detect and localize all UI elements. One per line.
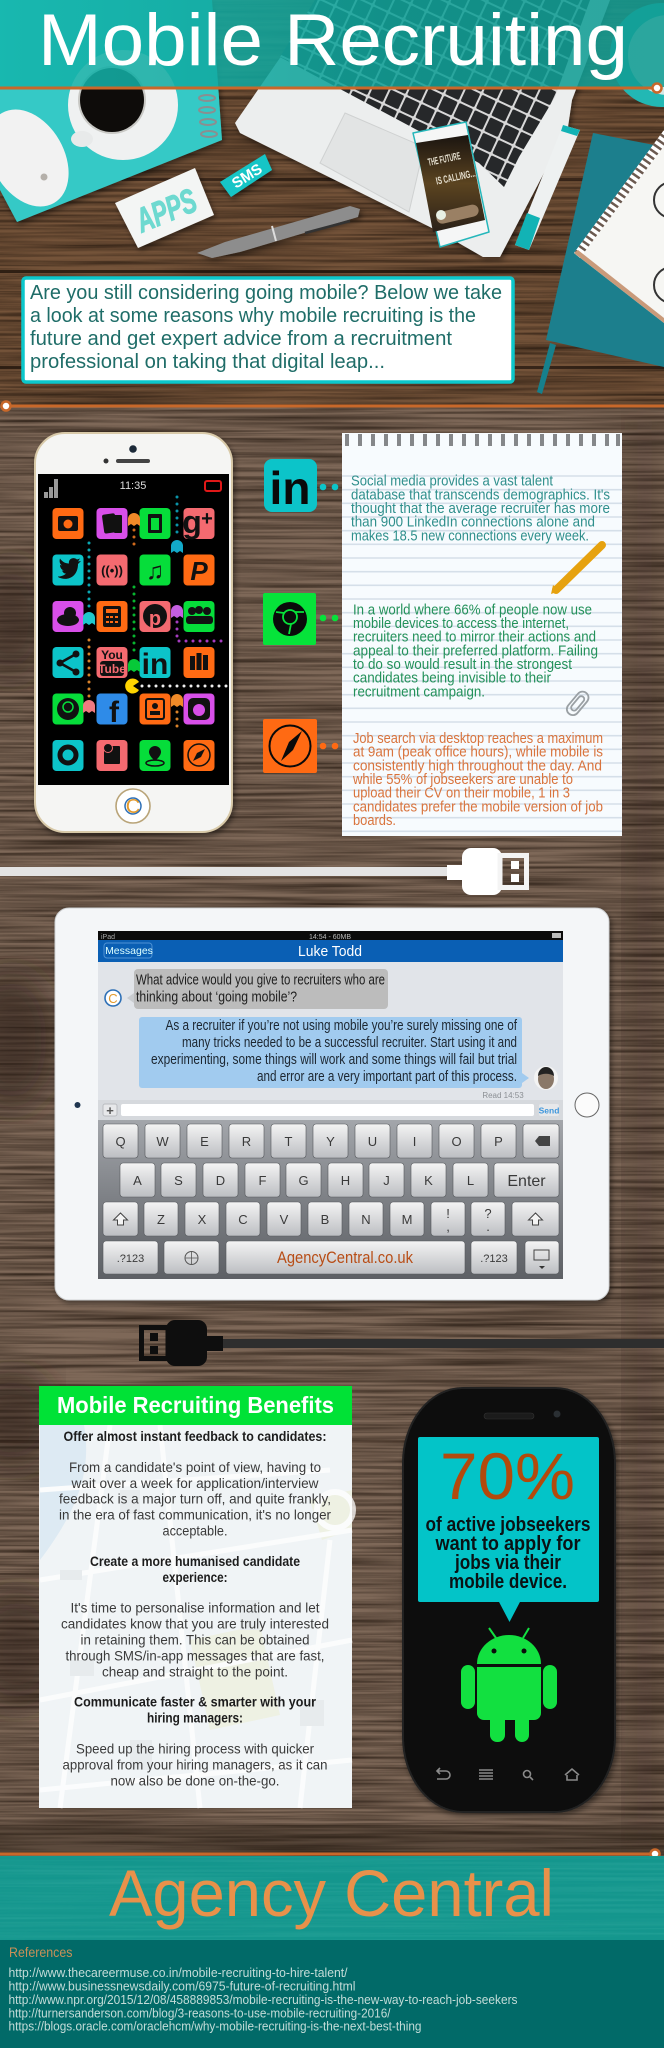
text block: job search: [352, 730, 603, 829]
benefit 1: feedback is a major turn off, and quite frankly,: [59, 1491, 331, 1507]
phone nav buttons: [437, 1768, 579, 1780]
status bar: [98, 931, 563, 941]
pacman trail dots and ghosts: [83, 497, 227, 728]
icon: silver pen: [197, 206, 360, 258]
app glyphs row 5: f: [109, 696, 120, 729]
text block: job search: while 55% of jobseekers are unable to: [352, 771, 573, 788]
text block: internet usage: appeal to their preferred platform. Failing: [353, 642, 598, 659]
answer bubble: and error are a very important part of this process.: [257, 1068, 517, 1085]
brand name: Agency Central: [109, 1856, 554, 1930]
text block: social media: [351, 473, 610, 544]
app glyphs row 4: Tube: [98, 662, 126, 676]
earpiece and camera: [484, 1410, 560, 1419]
callout: 70% statistic: want to apply for: [435, 1533, 581, 1555]
app glyphs row 2: [58, 556, 208, 586]
nav bar: [98, 940, 563, 962]
app glyphs row 2: P: [190, 556, 208, 586]
app icon grid: [52, 504, 214, 771]
keyboard row 3: !: [446, 1206, 450, 1221]
reference links: http://turnersanderson.com/blog/3-reasons-to-use-mobile-recruiting-2016/: [8, 2005, 391, 2020]
ghosts: [83, 513, 183, 713]
icon: coffee cup: [68, 50, 178, 160]
social icon: chrome: [263, 593, 338, 645]
benefit 2: in retaining them. This can be obtained: [80, 1631, 310, 1647]
answer bubble: many tricks needed to be a successful recruiter. Start using it and: [182, 1034, 517, 1051]
app glyphs row 2: ((•)): [101, 563, 123, 578]
social icon: linkedin: [264, 459, 338, 514]
notepad panel: [342, 433, 622, 836]
pacman: [125, 679, 139, 694]
text block: job search: Job search via desktop reaches a maximum: [353, 730, 603, 747]
read receipt: Read 14:53: [482, 1091, 524, 1100]
question bubble: What advice would you give to recruiters who are: [136, 971, 385, 988]
references heading: References: [9, 1944, 72, 1960]
divider line with node top: [0, 84, 662, 92]
app glyphs row 1: +: [201, 508, 213, 530]
app glyphs row 1: [58, 504, 213, 540]
app glyphs row 6: [60, 744, 210, 766]
keyboard row 3: .: [486, 1219, 490, 1234]
text block: internet usage: In a world where 66% of people now use: [353, 601, 592, 618]
benefit 2: experience:: [162, 1569, 228, 1585]
question bubble: [127, 969, 388, 1009]
recruiter logo avatar: [105, 990, 121, 1006]
keyboard row 2: G: [298, 1173, 309, 1188]
keyboard row 2: [120, 1163, 559, 1197]
footer references: [0, 1940, 664, 2048]
avatar: Luke Todd: [534, 1066, 558, 1090]
text block: internet usage: mobile devices to access the internet,: [353, 615, 569, 632]
callout: 70% statistic: mobile device.: [449, 1571, 567, 1593]
icon: computer mouse: [0, 95, 85, 221]
android phone: [403, 1388, 615, 1812]
keyboard row 1: Q: [115, 1134, 126, 1149]
status bar: [44, 479, 221, 498]
app glyphs row 1: g: [182, 504, 202, 540]
text block: job search: candidates prefer the mobile version of job: [353, 798, 603, 815]
icon: smartphone on desk: [413, 122, 489, 247]
question bubble: thinking about ‘going mobile’?: [136, 989, 297, 1006]
keyboard row 1: U: [368, 1134, 377, 1149]
reference links: http://www.thecareermuse.co.in/mobile-recruiting-to-hire-talent/: [8, 1965, 348, 1980]
keyboard row 1: Y: [326, 1134, 335, 1149]
keyboard row 1: W: [156, 1134, 169, 1149]
app glyphs row 2: ♫: [146, 558, 164, 585]
callout: 70% statistic: 70%: [440, 1439, 575, 1513]
reference links: [8, 1965, 518, 2034]
text block: internet usage: recruitment campaign.: [353, 683, 485, 700]
answer bubble: experimenting, some things will work and some things will fail but trial: [151, 1051, 517, 1068]
keyboard row 1: T: [285, 1134, 293, 1149]
benefit 2: [61, 1553, 329, 1679]
keyboard row 3: C: [238, 1212, 248, 1227]
white USB cable: [0, 848, 526, 895]
icon: teal notebook left: [0, 0, 222, 222]
message input bar: +: [106, 1103, 114, 1118]
ruled lines: [342, 476, 622, 831]
keyboard row 2: K: [424, 1173, 433, 1188]
home button: [116, 789, 150, 823]
app glyphs row 3: p: [149, 608, 161, 630]
keyboard row 1: [103, 1124, 559, 1158]
callout: 70% statistic: [418, 1437, 599, 1622]
text block: internet usage: recruiters need to mirror their actions and: [353, 629, 596, 646]
panel header: Mobile Recruiting Benefits: [57, 1392, 334, 1418]
app glyphs row 4: You: [101, 648, 123, 662]
benefit 3: [62, 1694, 328, 1788]
benefit 1: in the era of fast communication, it's no longer: [59, 1507, 331, 1523]
text block: social media: than 900 LinkedIn connections alone and: [351, 514, 595, 531]
text block: social media: makes 18.5 new connections every week.: [351, 527, 589, 544]
notepad binding rings: [347, 434, 618, 446]
home button: C: [126, 796, 140, 818]
status bar: 14:54 - 60MB: [309, 934, 351, 941]
text block: internet usage: to do so would result in the strongest: [353, 656, 573, 673]
text block: social media: database that transcends demographics. It's: [351, 486, 610, 503]
icon: apps card: APPS: [130, 182, 202, 240]
icon: sms tag: [220, 154, 272, 197]
benefit 3: hiring managers:: [147, 1710, 243, 1726]
benefit 2: Create a more humanised candidate: [90, 1553, 300, 1569]
divider line with node second: [2, 402, 664, 410]
benefit 1: From a candidate's point of view, having to: [69, 1459, 321, 1475]
icon: pencil: [551, 545, 602, 594]
keyboard row 1: E: [200, 1134, 209, 1149]
icon: smartphone on desk: THE FUTURE: [427, 150, 462, 169]
tablet screen: [98, 931, 563, 1279]
intro callout: Are you still considering going mobile? Below we take: [30, 282, 502, 304]
intro callout: future and get expert advice from a recruitment: [30, 328, 452, 350]
icon: paperclip: [564, 689, 591, 718]
header band: [0, 0, 664, 87]
benefit 3: now also be done on-the-go.: [110, 1772, 280, 1788]
keyboard row 3: ,: [446, 1219, 450, 1234]
keyboard row 4: .?123: [117, 1253, 144, 1265]
keyboard row 4: .?123: [480, 1253, 508, 1265]
text block: social media: Social media provides a vast talent: [351, 473, 554, 490]
keyboard row 3: X: [198, 1212, 207, 1227]
keyboard row 2: H: [341, 1173, 350, 1188]
keyboard row 3: [103, 1202, 559, 1236]
keyboard row 3: Z: [157, 1212, 165, 1227]
title: Mobile Recruiting: [38, 0, 628, 81]
icon: sms tag: SMS: [229, 161, 266, 192]
icon: android robot: [461, 1628, 557, 1742]
reference links: http://www.businessnewsdaily.com/6975-future-of-recruiting.html: [8, 1978, 356, 1993]
benefit 1: Offer almost instant feedback to candidates:: [64, 1428, 326, 1444]
text block: job search: at 9am (peak office hours), while mobile is: [353, 744, 603, 761]
keyboard row 2: F: [259, 1173, 267, 1188]
keyboard row 2: D: [216, 1173, 225, 1188]
callout: 70% statistic: of active jobseekers: [426, 1514, 590, 1536]
brand band: [0, 1856, 664, 1940]
benefit 2: cheap and straight to the point.: [102, 1663, 288, 1679]
answer bubble: As a recruiter if you’re not using mobile you’re surely missing one of: [166, 1017, 518, 1034]
app glyphs row 3: [57, 604, 213, 630]
black USB cable: [142, 1320, 664, 1366]
phone screen: [38, 474, 229, 785]
icon: laptop: [235, 0, 610, 257]
keyboard row 3: N: [361, 1212, 371, 1227]
app glyphs row 5: [57, 696, 210, 729]
intro callout: a look at some reasons why mobile recruiting is the: [30, 305, 476, 327]
answer bubble: [139, 1017, 529, 1088]
benefit 1: [59, 1428, 331, 1539]
text block: internet usage: [353, 601, 598, 700]
benefit 2: It's time to personalise information and let: [70, 1600, 320, 1616]
background: top desk photo: [0, 0, 664, 406]
icon: apps card: [115, 168, 214, 248]
benefit 2: candidates know that you are truly interested: [61, 1616, 329, 1632]
keyboard row 3: ?: [484, 1206, 492, 1221]
keyboard row 2: Enter: [507, 1173, 546, 1190]
keyboard row 2: S: [174, 1173, 183, 1188]
nav bar: Luke Todd: [298, 943, 362, 960]
icon: smartphone on desk: IS CALLING...: [435, 168, 477, 188]
keyboard row 1: I: [413, 1134, 416, 1149]
icon: desk clock: [610, 3, 664, 107]
background: wood desk lower: [0, 400, 664, 1860]
reference links: https://blogs.oracle.com/oraclehcm/why-mobile-recruiting-is-the-next-best-thing: [8, 2019, 422, 2034]
status bar: iPad: [101, 934, 115, 941]
benefit 2: through SMS/in-app messages that are fast,: [66, 1647, 324, 1663]
white smartphone with app grid: [35, 433, 232, 832]
keyboard row 1: P: [494, 1134, 503, 1149]
text block: job search: upload their CV on their mobile, 1 in 3: [353, 785, 570, 802]
intro callout: [23, 278, 513, 382]
keyboard row 2: A: [133, 1173, 142, 1188]
icon: spiral notebook with glasses: [574, 130, 664, 323]
keyboard row 3: V: [280, 1212, 289, 1227]
onscreen keyboard: [98, 1120, 563, 1279]
benefit 1: acceptable.: [162, 1523, 228, 1539]
icon: teal journal: [537, 133, 664, 394]
app glyphs row 4: [56, 648, 208, 681]
keyboard brand text: AgencyCentral.co.uk: [277, 1248, 413, 1267]
keyboard row 1: O: [451, 1134, 462, 1149]
divider line with node third: [0, 1850, 660, 1858]
phone earpiece and camera: [104, 445, 150, 464]
message input bar: Send: [539, 1106, 559, 1116]
social icon: linkedin: in: [270, 462, 310, 514]
benefit 3: approval from your hiring managers, as it can: [62, 1756, 328, 1772]
keyboard row 4: [103, 1241, 559, 1274]
tablet camera and home button: [74, 1093, 599, 1117]
panel: mobile recruiting benefits: [39, 1386, 353, 1808]
map pattern background: [40, 1425, 353, 1808]
social icon: compass: [263, 719, 338, 773]
icon: marker: [515, 125, 580, 250]
keyboard row 3: M: [402, 1212, 412, 1227]
text block: internet usage: candidates being invisible to their: [353, 670, 551, 687]
message input bar: [98, 1100, 563, 1120]
recruiter logo avatar: C: [108, 991, 118, 1006]
keyboard row 3: B: [321, 1212, 329, 1227]
benefit 3: Communicate faster & smarter with your: [74, 1694, 316, 1710]
callout: 70% statistic: jobs via their: [454, 1552, 561, 1574]
intro callout: professional on taking that digital leap...: [30, 351, 385, 373]
keyboard row 2: J: [383, 1173, 390, 1188]
app glyphs row 4: in: [142, 648, 168, 681]
keyboard row 2: L: [467, 1173, 474, 1188]
tablet with chat: [55, 908, 609, 1300]
status bar: 11:35: [120, 480, 146, 492]
benefit 3: Speed up the hiring process with quicker: [76, 1740, 314, 1756]
reference links: http://www.npr.org/2015/12/08/458889853/mobile-recruiting-is-the-new-way-to-reach-job-seekers: [8, 1992, 518, 2007]
benefit 1: wait over a week for application/interview: [71, 1475, 319, 1491]
text block: job search: consistently high throughout the day. And: [353, 757, 602, 774]
icon: notebook rings: [199, 95, 217, 137]
nav bar: Messages: [105, 945, 153, 957]
text block: job search: boards.: [353, 812, 396, 829]
text block: social media: thought that the average recruiter has more: [351, 500, 610, 517]
panel header: [39, 1386, 352, 1425]
keyboard row 1: R: [242, 1134, 251, 1149]
